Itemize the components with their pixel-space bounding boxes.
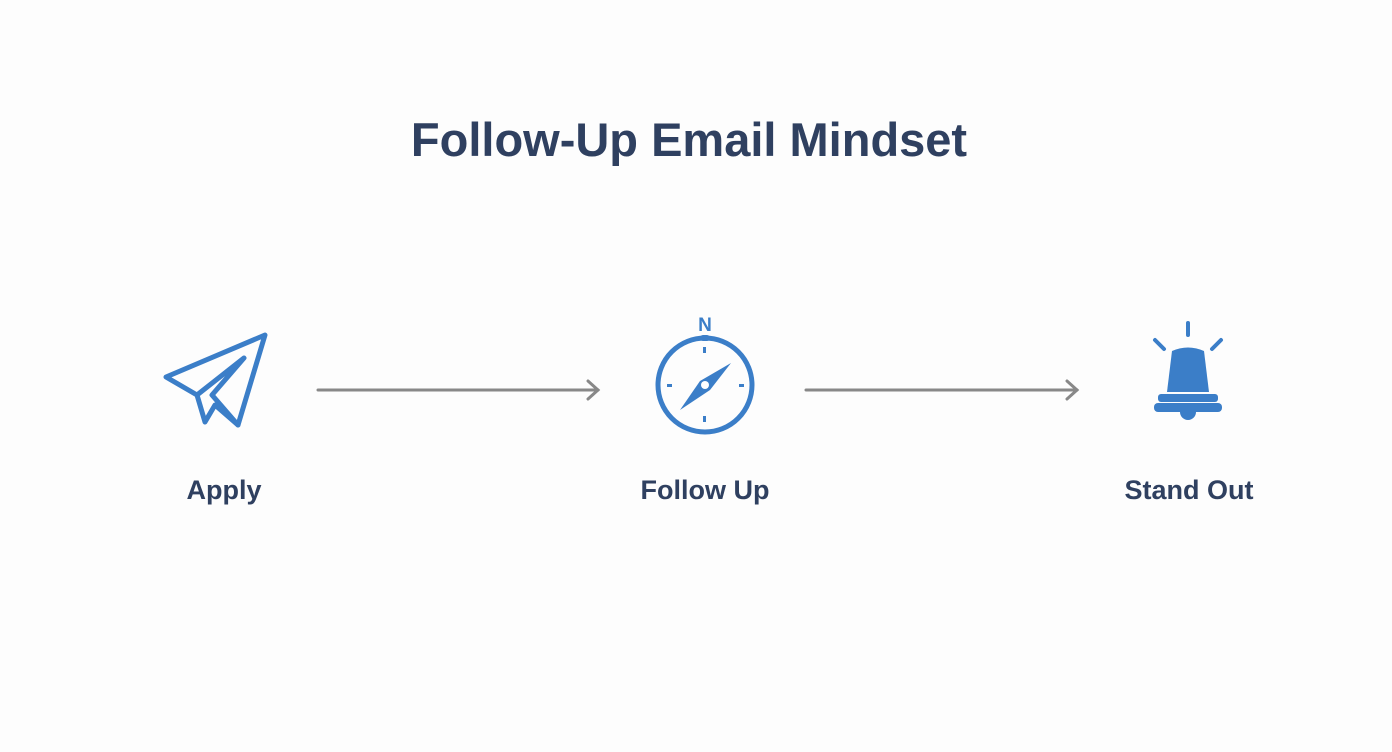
label: Apply: Apply [186, 475, 262, 505]
icon: compass: N [698, 315, 712, 336]
icon: paper plane [166, 335, 265, 425]
arrow 1 [318, 381, 598, 399]
arrow 2 [806, 381, 1077, 399]
label: Follow Up: Follow Up [640, 475, 769, 505]
icon: compass [658, 315, 752, 432]
title: Follow-Up Email Mindset [411, 113, 967, 166]
icon: bell [1154, 323, 1222, 420]
label: Stand Out: Stand Out [1124, 475, 1254, 505]
